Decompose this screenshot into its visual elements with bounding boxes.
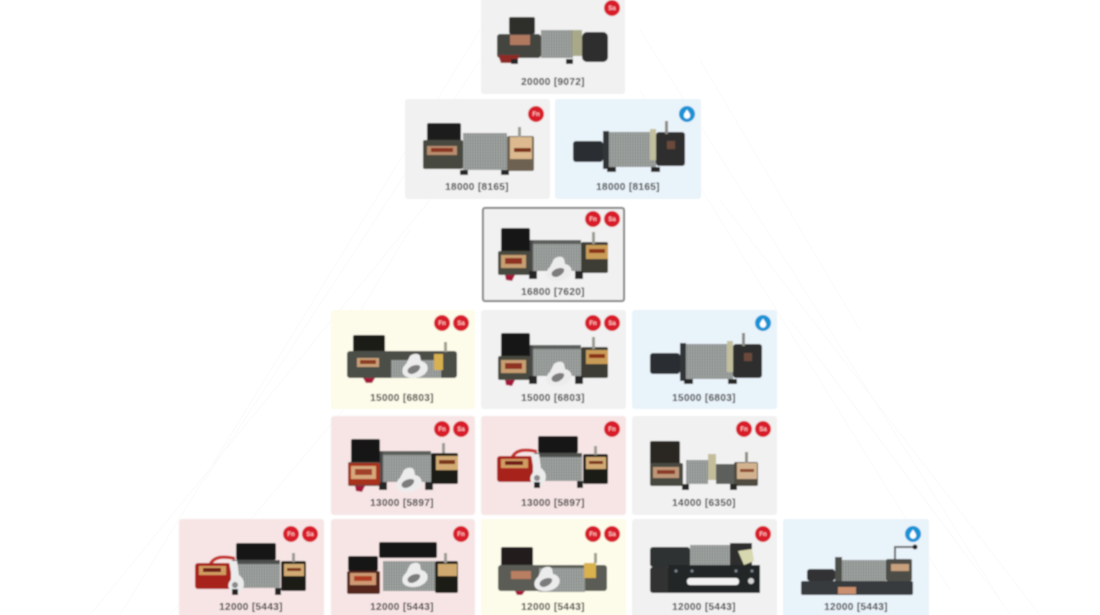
label: 20000 [9072] (521, 77, 585, 88)
badge (755, 315, 771, 331)
card: 13000 (5897) pink left (331, 416, 475, 515)
badges (585, 211, 620, 227)
badges: Sa (457, 321, 465, 327)
winch illustration (497, 436, 608, 488)
badge: Fn (532, 112, 540, 118)
card: 16800 (7620) highlighted (483, 208, 624, 301)
card: 12000 (5443) gray plate-mount (632, 519, 777, 615)
label: 12000 [5443] (370, 602, 434, 613)
badges (585, 315, 620, 331)
badges: Fn (438, 321, 446, 327)
badges: Fn (438, 427, 446, 433)
winch illustration (348, 439, 458, 492)
winch illustration (650, 333, 762, 384)
winch illustration (650, 441, 758, 490)
card: 13000 (5897) pink middle (481, 416, 626, 515)
winch illustration (347, 335, 457, 383)
label: 13000 [5897] (521, 498, 585, 509)
label: 15000 [6803] (370, 393, 434, 404)
winch illustration (650, 543, 760, 593)
badges: Fn (287, 532, 295, 538)
badges (736, 421, 771, 437)
label: 12000 [5443] (219, 602, 283, 613)
label: 15000 [6803] (672, 393, 736, 404)
badge: Fn (608, 427, 616, 433)
badges: Fn (589, 321, 597, 327)
label: 18000 [8165] (445, 182, 509, 193)
label: 16800 [7620] (521, 287, 585, 298)
badges: Fn (589, 217, 597, 223)
card: 12000 (5443) yellow (481, 519, 626, 615)
badge (604, 0, 620, 16)
badges: Fn (740, 427, 748, 433)
badges: Sa (608, 321, 616, 327)
badge (755, 526, 771, 542)
badge (905, 526, 921, 542)
card: 15000 (6803) hydraulic (632, 310, 777, 409)
badges: Sa (759, 427, 767, 433)
winch illustration (423, 123, 534, 175)
winch illustration (195, 543, 306, 595)
card: 12000 (5443) pink roller (331, 519, 475, 615)
winch illustration (498, 547, 607, 595)
card: 15000 (6803) yellow (331, 310, 475, 409)
label: 12000 [5443] (672, 602, 736, 613)
badges (434, 421, 469, 437)
badge (528, 106, 544, 122)
badges: Sa (608, 217, 616, 223)
winch illustration (498, 228, 608, 281)
badges: Sa (608, 532, 616, 538)
card: 14000 (6350) (632, 416, 777, 515)
badge: Fn (759, 532, 767, 538)
badges: Sa (306, 532, 314, 538)
badge: Fn (457, 532, 465, 538)
badge (679, 106, 695, 122)
badge: Sa (608, 6, 616, 12)
label: 12000 [5443] (521, 602, 585, 613)
card: 20000 (9072) (481, 0, 625, 94)
badges (585, 526, 620, 542)
winch illustration (573, 121, 685, 172)
badge (604, 421, 620, 437)
badge (453, 526, 469, 542)
winch illustration (498, 333, 608, 386)
card: 12000 (5443) hydraulic on plate (783, 519, 929, 615)
card: 18000 (8165) hydraulic (555, 99, 701, 199)
badges (283, 526, 318, 542)
badges: Sa (457, 427, 465, 433)
label: 13000 [5897] (370, 498, 434, 509)
winch illustration (347, 542, 458, 594)
winch illustration (801, 544, 918, 595)
card: 12000 (5443) pink red motor (179, 519, 324, 615)
card: 18000 (8165) electric (405, 99, 550, 199)
label: 12000 [5443] (824, 602, 888, 613)
label: 15000 [6803] (521, 393, 585, 404)
card: 15000 (6803) gray (481, 310, 626, 409)
badges (434, 315, 469, 331)
label: 14000 [6350] (672, 498, 736, 509)
label: 18000 [8165] (596, 182, 660, 193)
badges: Fn (589, 532, 597, 538)
winch illustration (497, 17, 608, 64)
